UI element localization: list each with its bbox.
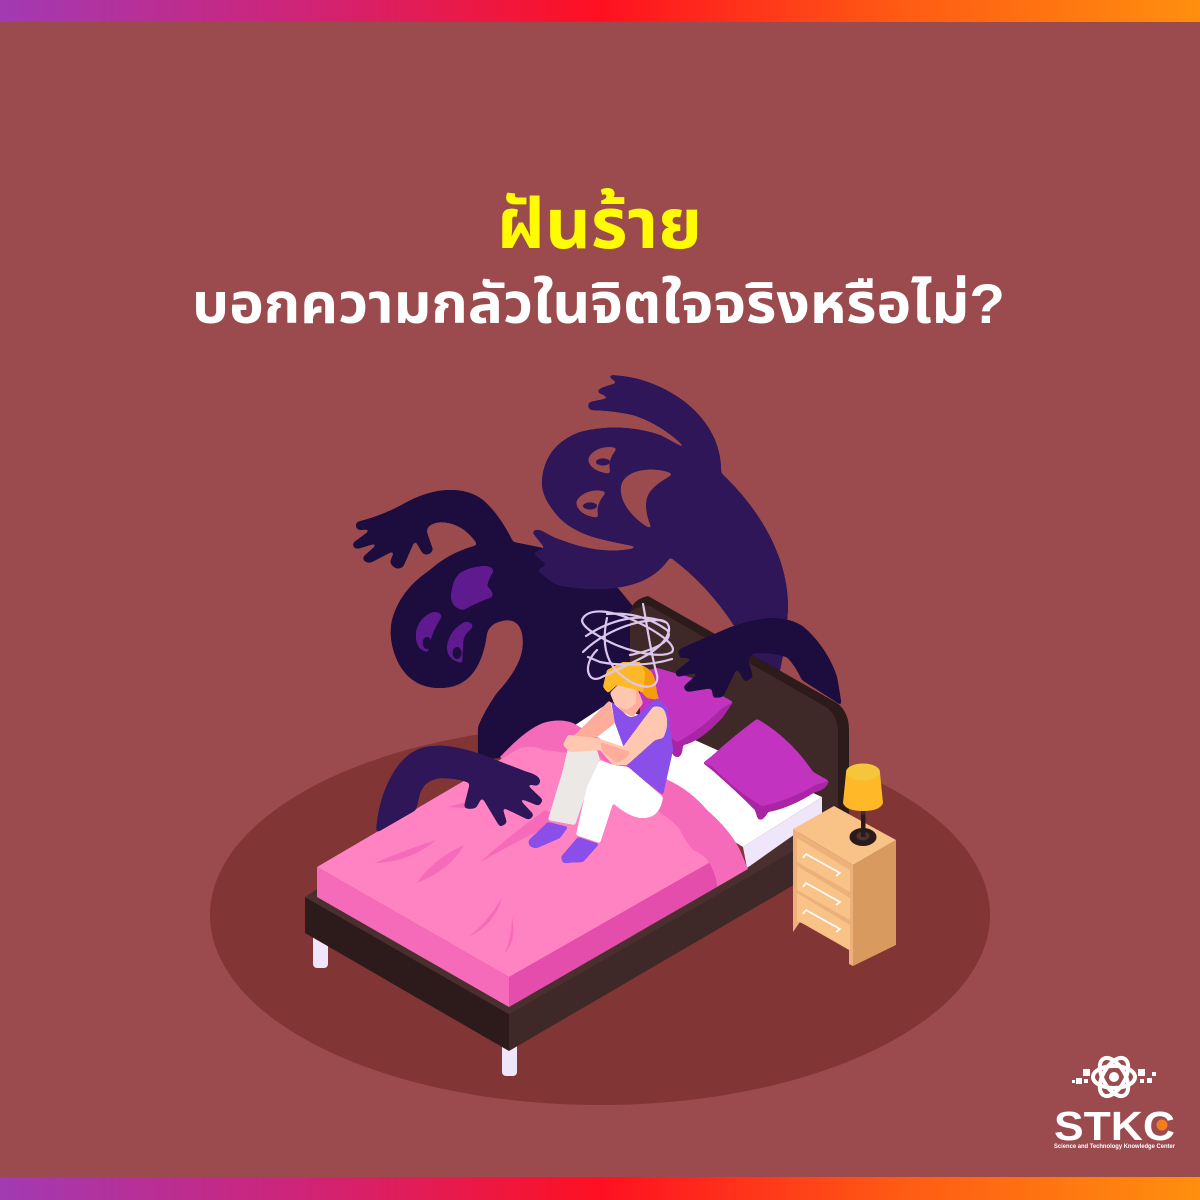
left pillow: [640, 668, 733, 757]
monster right eye: [447, 622, 472, 663]
bed: [305, 596, 849, 1076]
logo dot: [1156, 1120, 1168, 1130]
nightstand top: [793, 806, 896, 865]
STKC logo: [1054, 1053, 1176, 1150]
near sock: [561, 837, 599, 863]
headboard: [630, 596, 849, 825]
logo wordmark: STKC: [1054, 1103, 1175, 1149]
lamp base: [850, 828, 876, 846]
shadow monster: front body: [353, 490, 640, 760]
white sheet: [560, 702, 822, 847]
neck: [612, 688, 643, 717]
bottom gradient bar: [0, 1177, 1200, 1200]
title: [192, 185, 1005, 335]
subheading: question: บอกความกลัวในจิตใจจริงหรือไม่?: [192, 272, 1005, 335]
far sock: [529, 822, 568, 848]
lamp shade top: [846, 764, 880, 780]
frame top strip: [305, 815, 840, 1014]
shadow monster: back body: [532, 375, 788, 680]
back monster pupils: [583, 458, 610, 510]
nightstand front: [793, 829, 853, 966]
sheet side: [743, 797, 822, 868]
drawer 3: [797, 893, 850, 950]
bed leg left: [313, 925, 328, 968]
person: [529, 662, 673, 863]
drawer handles: [803, 854, 840, 932]
drawer 2: [797, 866, 850, 920]
far leg: [548, 748, 600, 825]
right pillow: [703, 719, 829, 820]
top gradient bar: [0, 0, 1200, 22]
headboard front: [630, 606, 838, 830]
blanket top: [317, 747, 709, 977]
shadow monster hand on headboard: [675, 618, 842, 707]
mattress right face: [509, 863, 717, 1007]
far arm: [570, 700, 615, 738]
table lamp: [843, 764, 883, 846]
blanket fold: [500, 720, 748, 887]
blanket wrinkles: [375, 802, 555, 953]
hair back: [640, 665, 659, 700]
floor ellipse: [210, 725, 990, 1105]
shadow monster hand on bed: [376, 746, 543, 833]
atom emblem: [1093, 1053, 1135, 1101]
near arm: [563, 707, 667, 765]
lamp stem: [861, 805, 866, 837]
scribble above head: [582, 604, 673, 687]
nightstand: [793, 806, 896, 966]
frame right face: [509, 824, 840, 1051]
monster pupils: [422, 637, 462, 659]
near leg: [576, 760, 663, 843]
tank top: [611, 698, 673, 795]
nightstand side: [853, 840, 896, 966]
monster forehead patch: [451, 566, 493, 610]
heading: nightmare: ฝันร้าย: [497, 185, 702, 263]
face: [610, 685, 636, 710]
logo tagline: Science and Technology Knowledge Center: [1054, 1144, 1176, 1150]
lamp shade: [843, 773, 883, 811]
hair front: [603, 662, 645, 693]
mattress left face: [317, 867, 509, 1007]
bed leg front: [502, 1035, 517, 1076]
frame left face: [305, 897, 509, 1051]
hand detail: [600, 742, 630, 763]
monster left eye: [416, 612, 441, 652]
drawer 1: [797, 838, 850, 892]
